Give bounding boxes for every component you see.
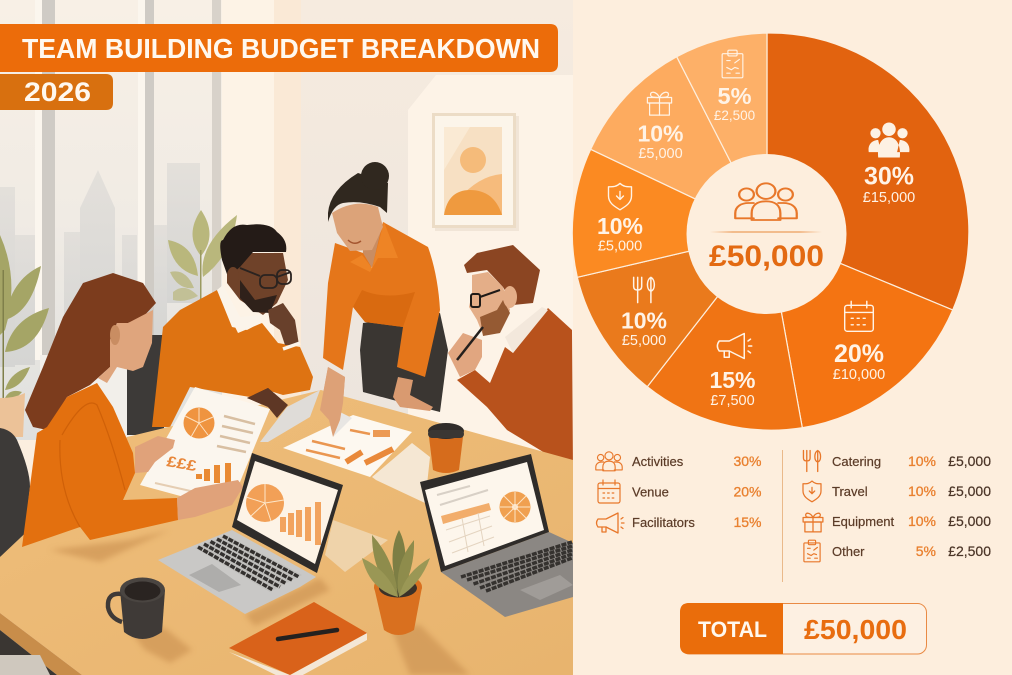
row: other: Other [832,544,865,559]
label: venue [833,340,885,383]
shadows on table [50,530,470,675]
total box [680,603,926,654]
row: travel: 10% [908,483,936,499]
right panel background [573,0,1012,675]
wooden table [0,390,573,675]
framed wall art [432,113,519,231]
centre circle [686,154,846,314]
row: venue: Venue [632,484,669,500]
row: venue: 20% [733,484,762,500]
icon: other [722,50,743,78]
title banner: TEAM BUILDING BUDGET BREAKDOWN [22,33,540,64]
year tag [0,74,113,110]
row: catering: 10% [908,453,936,469]
row: equipment [803,513,991,532]
label: other: 5% [718,83,752,109]
slice: catering 10% [577,233,767,387]
label: facilitators: £7,500 [710,393,755,409]
slice: other 5% [677,33,767,233]
icon: team outline [735,183,797,220]
row: activities: 30% [733,453,762,469]
label: activities: £15,000 [863,190,915,206]
legend: right column [803,451,991,562]
background plants [0,210,237,437]
illustration: team meeting around a table [0,0,573,675]
row: travel [803,481,991,502]
coffee cup [428,423,464,473]
icon: facilitators [717,334,752,358]
label: venue: 20% [834,340,884,368]
label: catering [621,308,667,349]
label: activities [863,162,915,206]
row: facilitators: Facilitators [632,515,695,530]
icon: venue [845,301,873,331]
dark chairs [0,335,164,557]
label: catering: £5,000 [622,333,666,349]
pointing hand [320,367,345,437]
row: other: £2,500 [948,543,991,559]
standing woman [320,162,448,437]
row: other [804,540,991,562]
laptop behind report [260,390,320,442]
potted plant [362,530,430,635]
pie chart [572,33,969,430]
year tag: 2026 [24,77,91,107]
held report with pie and bars: £££ [165,453,199,475]
icon: travel [608,183,632,210]
total box: £50,000 [804,614,907,645]
held report with pie and bars [140,387,270,500]
row: equipment: 10% [908,513,936,529]
label: facilitators [709,367,756,409]
dark mug [108,578,165,639]
label: activities: 30% [864,162,914,190]
seated man with glasses, centre [152,224,313,427]
centre total: £50,000 [709,240,824,273]
row: catering [803,451,991,471]
total box: TOTAL [698,617,767,642]
label: equipment [637,120,684,162]
row: catering: £5,000 [948,453,991,469]
label: equipment: 10% [637,120,684,146]
label: travel: £5,000 [598,238,642,254]
icon: catering [634,277,654,303]
legend: left column [596,452,762,533]
label: other: £2,500 [714,108,755,123]
title banner [0,24,558,72]
row: equipment: £5,000 [948,513,991,529]
woman's hands on report [135,436,243,520]
slice: venue 20% [767,233,953,428]
laptop with table and pie chart [420,454,573,617]
label: travel [597,213,643,254]
seated woman in orange jacket [22,273,178,547]
slice: equipment 10% [591,57,767,233]
row: travel: £5,000 [948,483,991,499]
label: other [714,83,755,123]
label: venue: £10,000 [833,367,885,383]
slice: facilitators 15% [647,233,802,430]
row: equipment: Equipment [832,514,895,529]
slice: activities 30% [767,33,969,310]
label: travel: 10% [597,213,643,239]
row: venue [598,480,762,503]
row: travel: Travel [832,484,868,499]
man's hand on laptop [247,388,288,418]
seated man with beard, right [448,245,573,470]
row: activities: Activities [632,454,684,469]
icon: equipment [647,92,672,115]
label: catering: 10% [621,308,667,334]
label: facilitators: 15% [709,367,756,393]
icon: activities [869,122,909,158]
slice: travel 10% [572,149,767,277]
label: equipment: £5,000 [638,146,683,162]
orange notebook and pen [229,602,367,675]
row: catering: Catering [832,454,881,469]
row: facilitators [596,513,762,533]
room walls and window [0,0,573,470]
row: facilitators: 15% [733,514,762,530]
row: other: 5% [916,543,936,559]
papers on the table [283,412,430,572]
row: activities [596,452,762,471]
laptop with pie and bar charts [158,453,343,614]
